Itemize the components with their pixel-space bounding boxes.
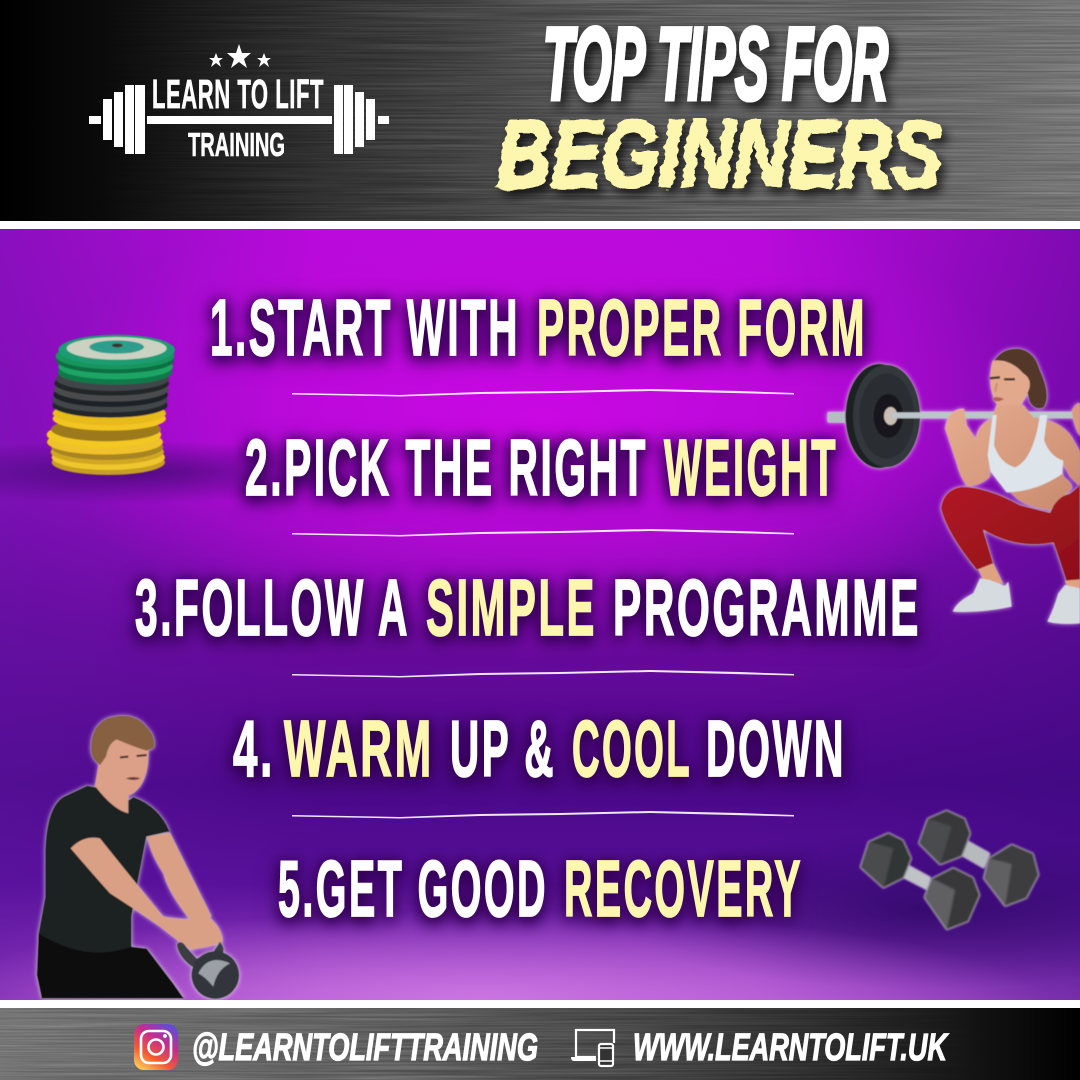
shin skin	[978, 563, 1080, 588]
website: WWW.LEARNTOLIFT.UK	[633, 1027, 949, 1069]
green plates	[56, 335, 175, 385]
man's face features	[120, 755, 147, 780]
tip 3: 3.FOLLOW A	[135, 563, 410, 652]
dark plates	[52, 366, 169, 418]
footer band	[0, 1008, 1080, 1080]
sports bra	[988, 415, 1063, 492]
tip 3: SIMPLE	[426, 563, 597, 652]
text: WEIGHT	[664, 423, 838, 512]
torso and arms	[945, 405, 1080, 510]
leggings	[941, 485, 1080, 581]
title line two: BEGINNERS	[497, 101, 942, 208]
barbell	[827, 364, 1080, 468]
photo: man swinging kettlebell	[37, 716, 239, 999]
tip 1: 1.START WITH	[210, 283, 520, 372]
tip 2: 2.PICK THE RIGHT	[245, 423, 648, 512]
tip 4	[233, 704, 846, 793]
rear dumbbell	[918, 810, 1039, 907]
shorts shade	[37, 933, 184, 999]
icon: laptop and phone	[571, 1030, 614, 1066]
icon: stack of weight plates	[47, 335, 175, 475]
front dumbbell	[860, 833, 980, 930]
tip 4: WARM	[284, 704, 434, 793]
logo: Learn to Lift Training	[89, 44, 389, 163]
tip 3	[135, 563, 921, 652]
logo wordmark: LEARN TO LIFT	[152, 71, 324, 117]
tip 4: 4.	[233, 704, 275, 793]
panel: purple tips background	[0, 229, 1080, 1000]
tip 4: DOWN	[706, 704, 846, 793]
text: RECOVERY	[564, 844, 803, 933]
logo stars	[209, 44, 271, 68]
header band	[0, 0, 1080, 221]
logo barbell	[89, 85, 389, 154]
head	[990, 360, 1030, 411]
shoes	[953, 578, 1080, 624]
torso and shorts	[37, 785, 184, 999]
title: Top Tips For Beginners	[497, 7, 942, 208]
right hand	[1072, 403, 1080, 437]
icon: pair of hex dumbbells	[860, 810, 1039, 930]
man's hair	[91, 716, 155, 765]
tip 4: UP &	[450, 704, 556, 793]
photo: woman squatting with barbell	[827, 348, 1080, 624]
logo subtitle: TRAINING	[188, 126, 285, 163]
tip 4: COOL	[572, 704, 692, 793]
man's arms	[71, 833, 223, 950]
tip 5: 5.GET GOOD	[278, 844, 548, 933]
instagram handle: @LEARNTOLIFTTRAINING	[192, 1027, 538, 1069]
kettlebell	[177, 942, 239, 999]
yellow plates	[47, 401, 166, 475]
ponytail and hair	[992, 348, 1047, 409]
icon: instagram	[134, 1024, 178, 1070]
man's neck and face	[95, 737, 148, 813]
woman's face features	[989, 377, 1015, 401]
